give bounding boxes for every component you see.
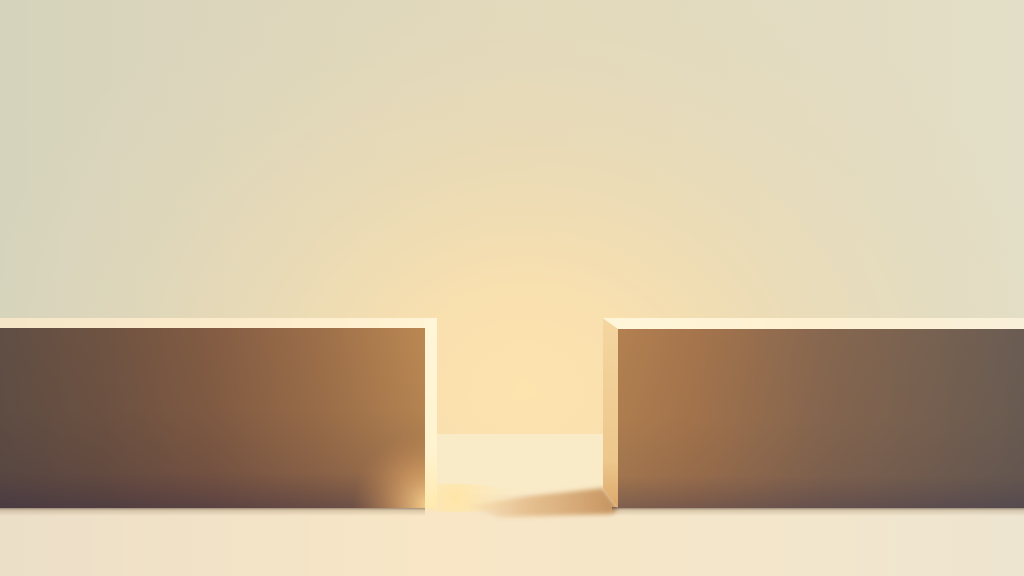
floor <box>0 434 1024 576</box>
contact shadow: right block <box>612 507 1024 516</box>
cast shadow on floor <box>462 488 618 517</box>
right block side face <box>603 319 618 508</box>
left block front face <box>0 328 425 508</box>
right block front face <box>618 329 1024 508</box>
left block top face <box>0 318 437 329</box>
left block lit side <box>425 318 437 508</box>
background wall <box>0 0 1024 436</box>
contact shadow: left block <box>0 507 425 516</box>
left block <box>0 318 437 508</box>
right block top face <box>603 318 1024 329</box>
right block <box>603 318 1024 508</box>
